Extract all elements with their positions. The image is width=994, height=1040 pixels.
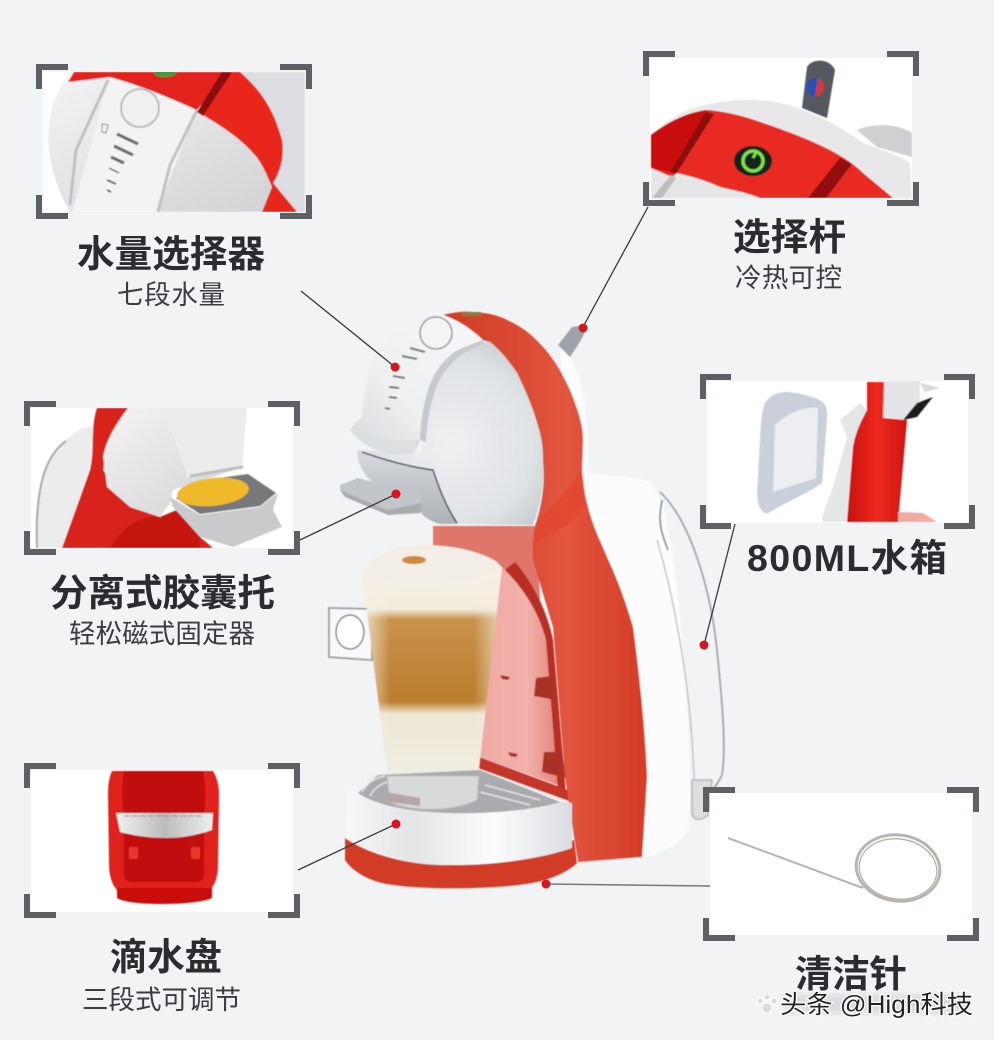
plate clips bbox=[500, 675, 566, 778]
drip tray bbox=[345, 770, 577, 888]
head grey underside bbox=[357, 450, 457, 524]
panel: capsule holder bbox=[27, 404, 297, 649]
recessed upper cavity bbox=[433, 526, 540, 600]
subheading: 冷热可控 bbox=[735, 263, 842, 293]
dark red plate strip bbox=[505, 562, 566, 795]
glass handle bbox=[329, 608, 372, 660]
icon: paw bbox=[757, 994, 777, 1013]
latte glass bbox=[329, 545, 502, 777]
corner brackets bbox=[27, 404, 297, 552]
heading: 清洁针 bbox=[795, 953, 907, 995]
red base bbox=[345, 835, 577, 888]
lower dark seam bbox=[362, 452, 457, 523]
leader lines with red dots bbox=[298, 207, 735, 888]
logo ring bbox=[420, 317, 452, 349]
heading: 800ML水箱 bbox=[747, 537, 947, 579]
needle wire bbox=[728, 829, 944, 907]
corner brackets bbox=[706, 790, 976, 938]
glass body bbox=[362, 567, 502, 777]
panel: selector lever bbox=[646, 54, 916, 293]
water selector front panel bbox=[350, 315, 485, 454]
subheading: 七段水量 bbox=[117, 280, 225, 310]
recessed pink back plate bbox=[479, 565, 560, 786]
heading: 选择杆 bbox=[733, 216, 846, 258]
capsule holder bbox=[340, 478, 422, 510]
panel: water selector bbox=[39, 67, 309, 310]
heading: 水量选择器 bbox=[77, 233, 266, 275]
obscured subheading smudge bbox=[786, 994, 966, 1014]
corner brackets bbox=[646, 54, 916, 203]
heading: 分离式胶囊托 bbox=[50, 572, 275, 614]
corner brackets bbox=[27, 766, 297, 915]
glass base bbox=[387, 776, 479, 809]
subheading: 轻松磁式固定器 bbox=[69, 619, 255, 649]
panel image bbox=[650, 58, 912, 198]
dome side shell bbox=[357, 342, 543, 525]
panel image bbox=[707, 381, 968, 523]
foam bbox=[362, 545, 502, 584]
grill bbox=[358, 770, 560, 813]
water tank bbox=[657, 492, 724, 819]
panel image bbox=[710, 793, 972, 935]
panel: cleaning needle bbox=[706, 790, 976, 995]
red central band bbox=[443, 312, 647, 862]
panel: water tank bbox=[703, 377, 972, 579]
heading: 滴水盘 bbox=[110, 936, 222, 978]
selector lever bbox=[558, 325, 587, 357]
top green button sliver bbox=[462, 312, 482, 316]
corner brackets bbox=[39, 67, 309, 216]
corner brackets bbox=[703, 377, 972, 526]
panel image bbox=[43, 69, 305, 212]
machine rear white body bbox=[560, 345, 690, 862]
panel image bbox=[31, 770, 293, 912]
panel: drip tray bbox=[27, 766, 297, 1015]
subheading: 三段式可调节 bbox=[82, 985, 241, 1015]
watermark bbox=[757, 991, 973, 1019]
watermark text: 头条 @High科技 bbox=[780, 991, 973, 1019]
coffee machine illustration bbox=[329, 312, 724, 888]
white tray bbox=[345, 773, 572, 865]
panel image bbox=[31, 408, 293, 548]
water level marks bbox=[385, 348, 425, 409]
